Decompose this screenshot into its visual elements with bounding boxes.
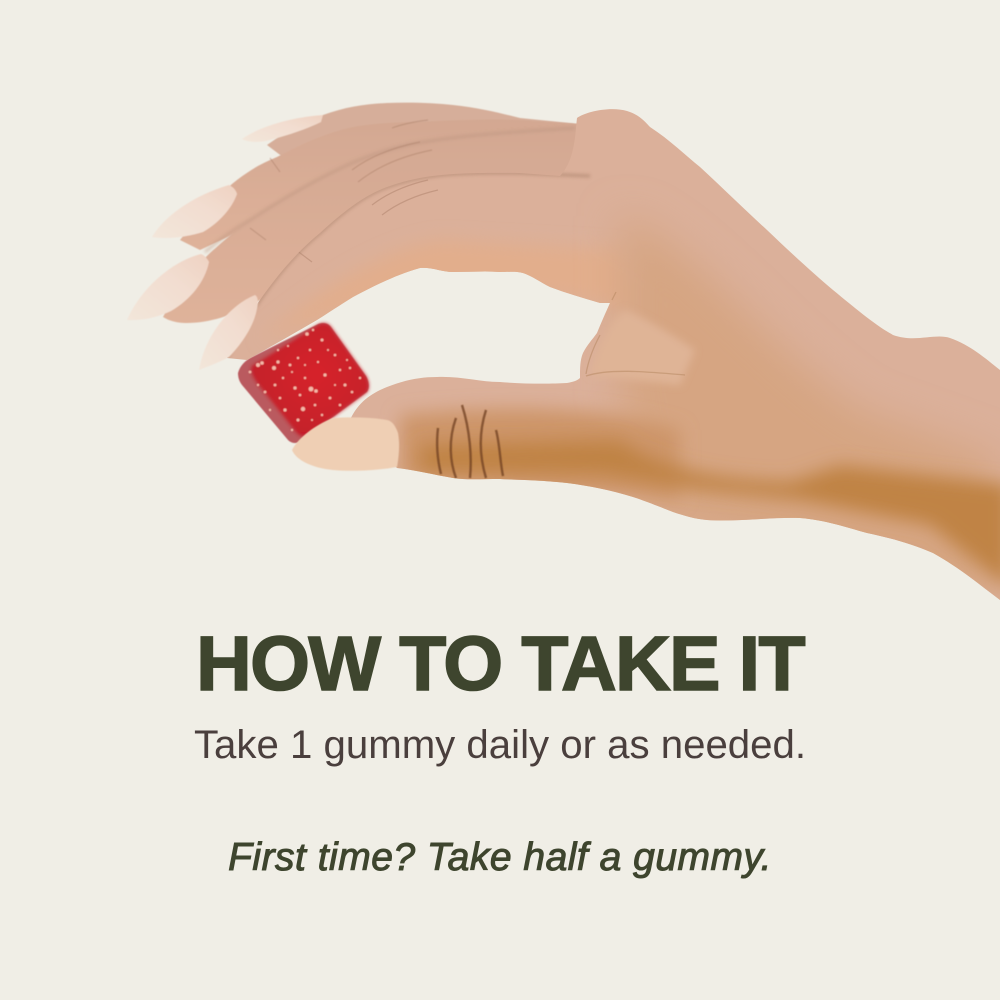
gummy: red square candy [238,323,369,443]
nail: thumb [292,417,399,471]
gummy sugar speckles [249,329,361,431]
instruction text: Take 1 gummy daily or as needed. [194,722,806,767]
back finger: pinky [242,103,590,170]
back finger: ring [152,120,590,250]
middle finger top shadow [205,128,575,252]
web crease [586,292,685,376]
skin shading: web of thumb [616,313,694,385]
nail: ring [152,185,237,238]
middle knuckle wrinkles [250,142,432,240]
thumb knuckle creases [437,405,503,478]
skin shading: thumb [400,409,680,500]
nail: index [199,295,258,370]
skin shading: warm index underside [297,242,614,328]
hand: palm, wrist, index finger and thumb [200,100,1000,610]
back finger: middle [127,127,590,323]
nail: pinky [242,115,323,142]
ring knuckle wrinkles [270,120,428,172]
finger top shadow [227,173,590,358]
nail: middle [127,254,209,320]
title: HOW TO TAKE IT [196,621,804,707]
skin shading: hand back [620,215,1000,610]
index wrinkles [296,180,438,262]
illustration: hand holding gummy [128,102,1000,600]
first-time note: First time? Take half a gummy. [228,836,772,879]
skin shading: orange tan band [420,440,1000,590]
